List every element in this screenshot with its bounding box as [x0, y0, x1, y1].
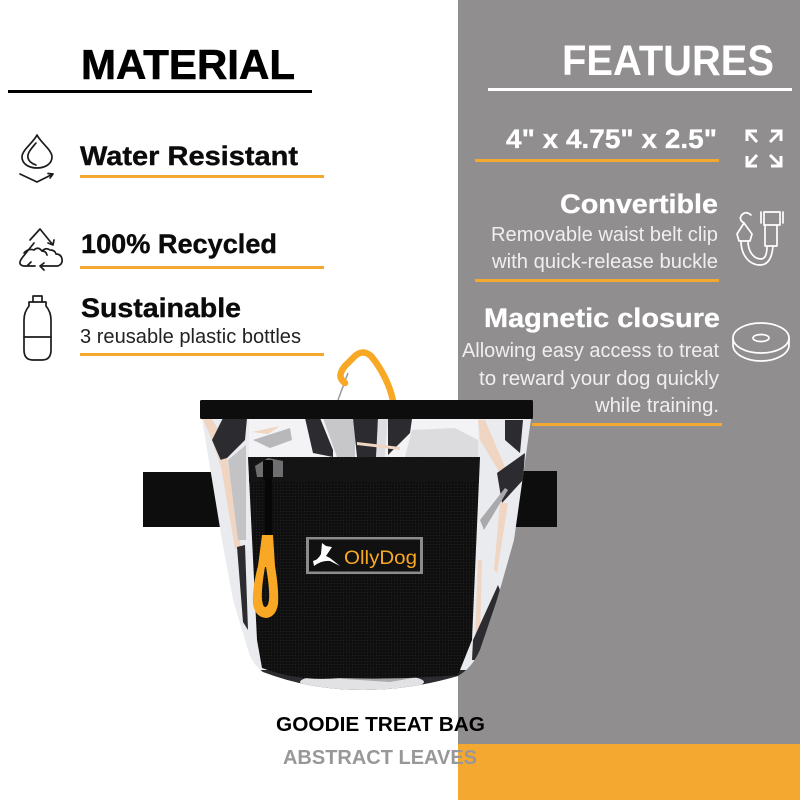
zipper band: [249, 458, 479, 482]
icon: plastic bottle: [24, 296, 51, 360]
item: sustainable: Sustainable: [81, 293, 241, 323]
item: dimensions: 4" x 4.75" x 2.5": [506, 124, 717, 154]
heading: material: [8, 41, 312, 93]
zipper pull: [255, 458, 283, 538]
black mesh front pocket: [248, 457, 480, 679]
item: convertible: Convertible: [560, 189, 718, 219]
panel: features list: [462, 124, 789, 426]
icon: magnet disc: [733, 323, 789, 361]
item: convertible: with quick-release buckle: [491, 251, 718, 273]
item: convertible: Removable waist belt clip: [491, 224, 718, 246]
heading: features: FEATURES: [562, 37, 774, 85]
icon: expand arrows: [747, 131, 781, 166]
caption: colourway: ABSTRACT LEAVES: [283, 746, 477, 769]
panel: material list: [20, 135, 324, 360]
orange zipper loop: [253, 535, 278, 618]
item: dimensions: [475, 124, 719, 162]
heading: material: MATERIAL: [81, 41, 295, 88]
logo patch: OllyDog: [344, 548, 417, 569]
item: magnetic closure: Allowing easy access to treat: [462, 340, 719, 362]
item: magnetic closure: to reward your dog quickly: [479, 368, 719, 390]
black top rim: [200, 400, 533, 419]
carabiner clip: [338, 352, 393, 401]
item: water resistant: Water Resistant: [80, 141, 298, 171]
item: magnetic closure: while training.: [594, 395, 719, 417]
item: magnetic closure: [462, 303, 722, 426]
icon: recycle: [20, 229, 62, 270]
item: sustainable: [80, 293, 324, 356]
product photo: treat bag: [143, 352, 557, 695]
caption: product name: GOODIE TREAT BAG: [276, 713, 485, 736]
icon: water drop: [20, 135, 53, 182]
icon: belt clip and buckle: [737, 212, 783, 265]
bag body with abstract leaves print: [195, 415, 540, 695]
background: orange corner block: [458, 744, 800, 800]
item: convertible: [475, 189, 719, 282]
item: sustainable: 3 reusable plastic bottles: [80, 326, 301, 348]
background: grey features panel: [458, 0, 800, 744]
item: water resistant: [80, 141, 324, 178]
item: recycled: 100% Recycled: [81, 229, 277, 259]
item: recycled: [80, 229, 324, 269]
logo patch: [306, 537, 423, 574]
waist belt: [143, 471, 557, 527]
heading: features: [488, 37, 792, 91]
item: magnetic closure: Magnetic closure: [484, 303, 720, 333]
